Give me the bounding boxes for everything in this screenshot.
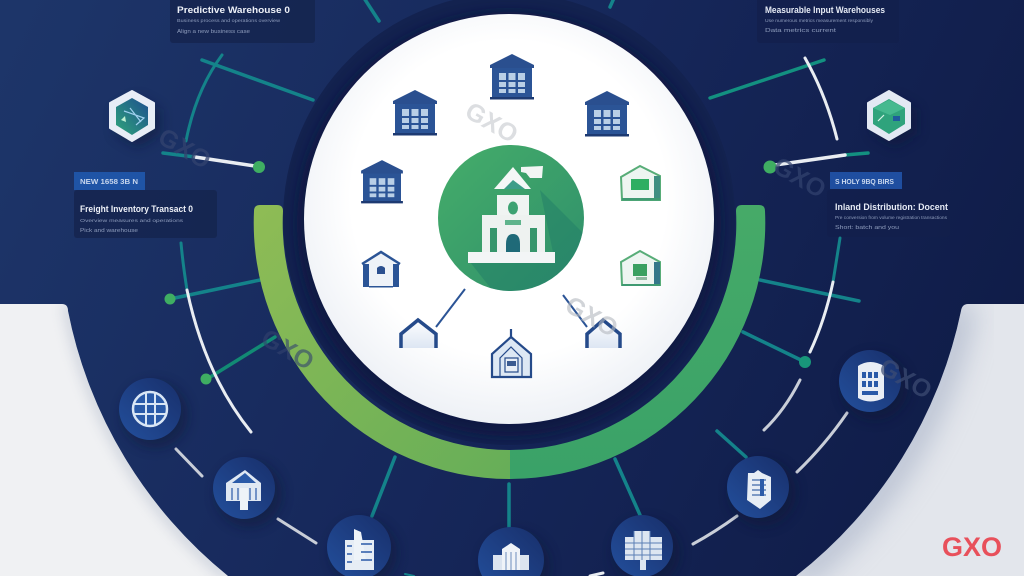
icon: building left [361, 160, 403, 203]
panel: right callout: Pre conversion from volume registration transactions [835, 215, 948, 220]
panel: top left callout [170, 0, 315, 43]
panel: white circle [297, 12, 721, 436]
panel: right callout [827, 172, 950, 237]
panel: top right callout: Use numerous metrics measurement responsibly [765, 18, 874, 23]
connector nodes [164, 160, 811, 384]
right tag: S HOLY 9BQ BIRS [835, 177, 894, 186]
panel: top left callout: Business process and operations overview [177, 18, 281, 23]
icon: building upper right [585, 91, 629, 136]
lower right light panel [780, 304, 1024, 576]
panel: top left callout: Align a new business case [177, 29, 250, 35]
green arc ring [254, 205, 765, 479]
node: tower [327, 515, 397, 576]
panel: right callout: Inland Distribution: Docent [835, 202, 949, 213]
icon: house left [362, 251, 400, 288]
node: city block [478, 527, 550, 576]
panel: right callout: Short: batch and you [835, 225, 899, 231]
watermarks: GXO [256, 324, 319, 376]
icon: green house upper right [621, 166, 660, 200]
node: office tree [611, 515, 680, 576]
panel: top right callout: Measurable Input Warehouses [765, 5, 885, 16]
lower left light panel [0, 304, 240, 576]
watermarks: GXO [560, 291, 623, 343]
connector lines [163, 0, 868, 576]
panel: left callout: Pick and warehouse [80, 228, 138, 234]
icon: building top [490, 54, 534, 100]
icon: building upper left [393, 90, 437, 136]
dark halo around centre [283, 0, 735, 445]
centre green medallion [438, 145, 584, 291]
node: round tower [839, 350, 908, 420]
panel: top right callout [757, 0, 899, 43]
panel: left callout: Freight Inventory Transact 0 [80, 204, 193, 215]
icon: hexagon left [110, 91, 160, 147]
icon: green house lower right [621, 251, 660, 286]
icon: house lower right with connector [563, 295, 621, 348]
panel: left callout [74, 172, 217, 238]
watermarks [153, 123, 937, 405]
watermarks: GXO [768, 152, 831, 204]
left tag [74, 172, 145, 190]
icon: hexagon right [868, 91, 917, 147]
icon: central warehouse [468, 166, 555, 263]
watermarks: GXO [153, 123, 216, 175]
panel: left callout: Overview measures and operations [80, 218, 184, 223]
icon: house lower left with connector [399, 289, 465, 348]
panel: top right callout: Data metrics current [765, 28, 837, 34]
watermark in circle: GXO [460, 97, 523, 149]
logo: GXO: GXO [942, 532, 1002, 562]
left tag: NEW 1658 3B N [80, 177, 138, 186]
icon: gatehouse bottom [491, 329, 531, 377]
watermarks: GXO [874, 353, 937, 405]
node: warehouse [213, 457, 282, 527]
node: globe [119, 378, 188, 448]
node: shield building [727, 456, 796, 526]
panel: top left callout: Predictive Warehouse 0 [177, 5, 290, 16]
